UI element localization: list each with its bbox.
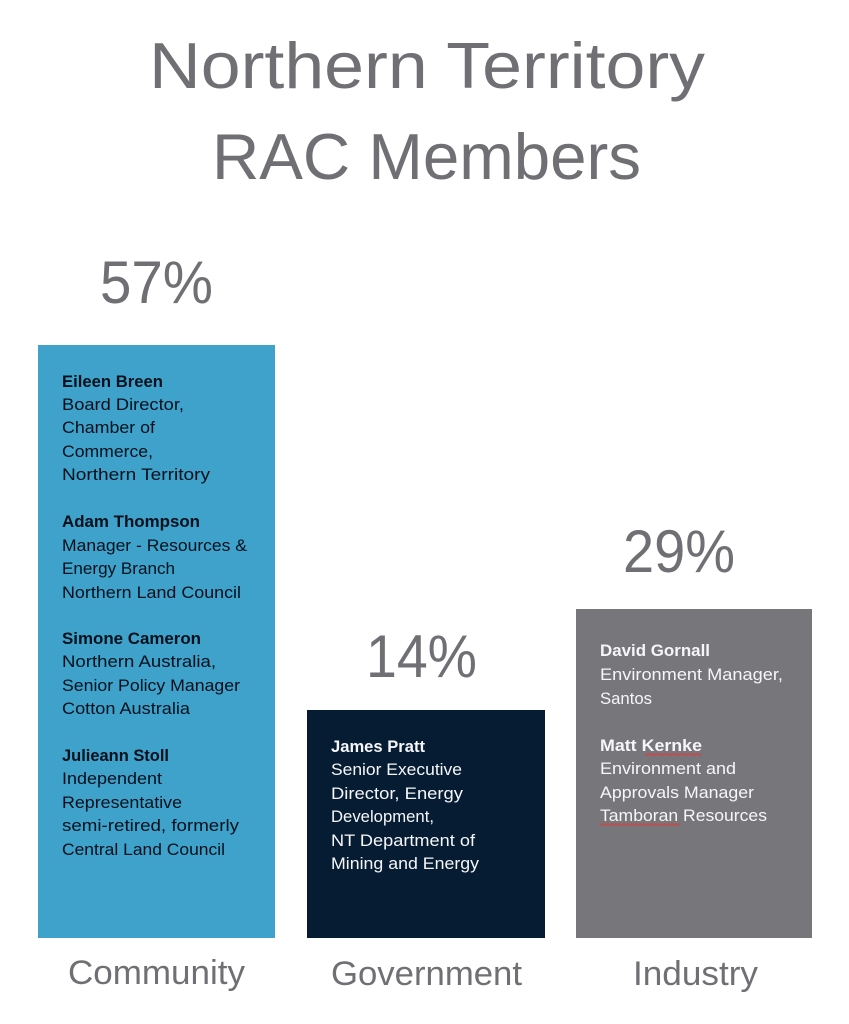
- government member: Mining and Energy: [331, 855, 480, 873]
- government member: Senior Executive: [331, 761, 462, 779]
- government percentage: 14%: [366, 623, 477, 690]
- community members: Northern Territory: [62, 466, 211, 484]
- government member: NT Department of: [331, 832, 475, 850]
- community members: Manager - Resources &: [62, 537, 247, 555]
- community members: Eileen Breen: [62, 373, 163, 391]
- industry members: Tamboran Resources: [600, 807, 767, 825]
- industry members: Environment and: [600, 760, 736, 778]
- community members: Northern Land Council: [62, 584, 241, 602]
- community members: Independent: [62, 770, 162, 788]
- community members: Cotton Australia: [62, 700, 191, 718]
- community members: Energy Branch: [62, 560, 175, 578]
- community label: Community: [68, 954, 245, 992]
- community percentage: 57%: [100, 249, 213, 316]
- industry bar: [576, 609, 812, 938]
- community members: Commerce,: [62, 443, 153, 461]
- community members: Adam Thompson: [62, 513, 200, 531]
- panel: community: [38, 249, 275, 992]
- government member: James Pratt: [331, 738, 425, 756]
- spell-check underline: Tamboran: [600, 824, 680, 826]
- spell-check underline: Kernke: [645, 754, 701, 756]
- community members: Board Director,: [62, 396, 184, 414]
- industry label: Industry: [633, 955, 758, 993]
- industry members: Matt Kernke: [600, 737, 702, 755]
- industry members: Environment Manager,: [600, 666, 783, 684]
- panel: industry: [576, 518, 812, 993]
- government label: Government: [331, 955, 523, 993]
- government bar: [307, 710, 545, 938]
- title: RAC Members: [212, 120, 641, 193]
- panel: government: [307, 623, 545, 993]
- government member: Director, Energy: [331, 785, 464, 803]
- community members: Simone Cameron: [62, 630, 201, 648]
- community members: semi-retired, formerly: [62, 817, 240, 835]
- industry members: Approvals Manager: [600, 784, 755, 802]
- industry members: David Gornall: [600, 642, 710, 660]
- industry members: [600, 642, 783, 825]
- community members: Northern Australia,: [62, 653, 216, 671]
- community members: Julieann Stoll: [62, 747, 169, 765]
- community bar: [38, 345, 275, 938]
- community members: Chamber of: [62, 419, 155, 437]
- community members: Central Land Council: [62, 841, 225, 859]
- industry members: Santos: [600, 690, 652, 708]
- title: Northern Territory: [149, 29, 706, 102]
- government member: Development,: [331, 808, 434, 826]
- title: [149, 29, 706, 193]
- community members: Representative: [62, 794, 182, 812]
- community members: [62, 373, 247, 859]
- industry percentage: 29%: [623, 518, 735, 585]
- community members: Senior Policy Manager: [62, 677, 241, 695]
- government member: [331, 738, 480, 873]
